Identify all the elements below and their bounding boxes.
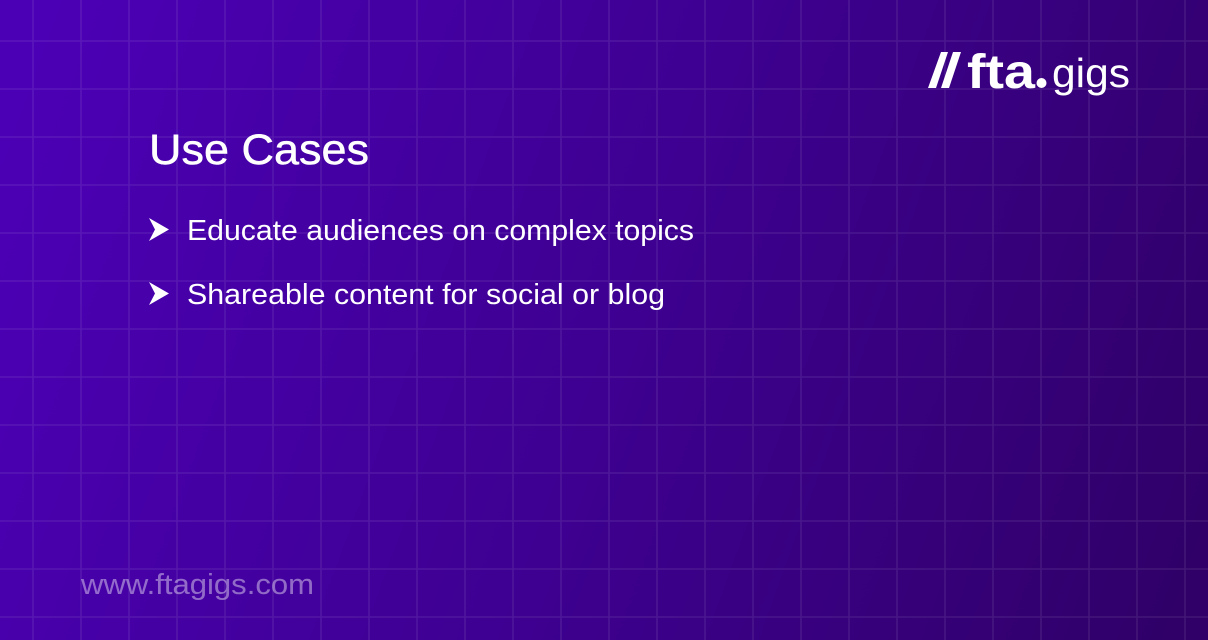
icon: arrow bullet 1 — [149, 218, 169, 241]
website url: www.ftagigs.com — [80, 569, 314, 601]
icon: double slash — [928, 52, 961, 88]
bullet text 1: Educate audiences on complex topics — [187, 215, 694, 247]
bullet text 2: Shareable content for social or blog — [187, 279, 665, 311]
logo wordmark: fta: fta — [967, 46, 1035, 99]
logo wordmark: gigs: gigs — [1052, 50, 1130, 96]
bullet list — [149, 215, 694, 311]
logo dot — [1036, 78, 1046, 88]
logo: fta.gigs — [928, 46, 1130, 99]
icon: arrow bullet 2 — [149, 282, 169, 305]
heading: Use Cases: Use Cases — [149, 126, 369, 174]
